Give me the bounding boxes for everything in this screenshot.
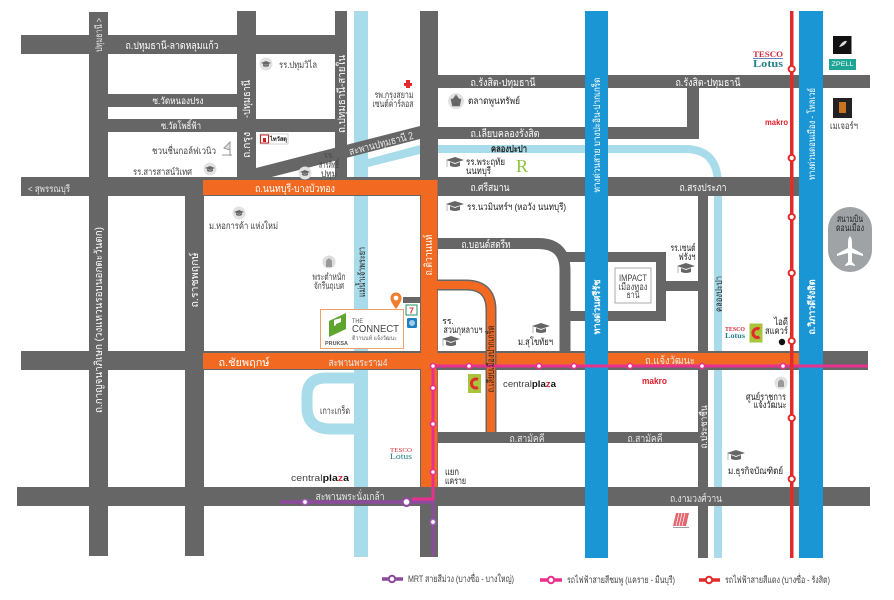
road labels vertical: ทางด่วนสาย บางปะอิน-ปากเกร็ด [590,78,603,192]
road labels vertical: ถ.เลียบเมืองปากเกร็ด [484,326,497,392]
purple MRT line [280,497,436,556]
IMPACT Muang Thong Thani: ธานี [626,289,640,301]
schools east: ม.สุโขทัยฯ [518,336,553,348]
airport: สนามบิน [837,214,863,225]
logo: Major [830,98,858,132]
market: ตลาดพูนทรัพย์ [468,95,520,107]
Khae Rai junction label [445,467,466,487]
road labels vertical: คลองปะปา [714,276,725,312]
road labels vertical: ถ.ปทุมธานี-สายใน [335,55,348,133]
logo: Tesco Lotus north: Lotus [753,58,784,70]
hospital [372,80,414,110]
IT Square with retail logos: สแควร์ [765,325,788,337]
IMPACT Muang Thong Thani: เมืองทอง [618,282,648,293]
legend: pink line [540,574,675,586]
road labels vertical: -ปทุมธานี [240,80,253,118]
market [448,93,520,109]
road labels vertical [93,18,818,449]
logo: makro north: makro [765,118,788,127]
logo: 7-Eleven: 7 [409,306,414,316]
place: schools and labels west: ปทุม [321,169,337,180]
schools east: ฟรังฯ [678,252,696,263]
road labels horizontal: สะพานปทุมธานี 2 [348,129,415,158]
place: schools and labels west: รร.สารสาสน์วิเทศ [133,166,192,178]
logo: Big C [468,374,481,393]
logo: Central Plaza east: centralplaza [503,379,557,390]
road labels horizontal: ถ.ศรีสมาน [470,181,510,194]
project pin and box: ติวานนท์ แจ้งวัฒนะ [352,334,397,342]
red line [789,11,795,558]
place: schools and labels west: รร. [324,151,334,160]
IT Square with retail logos: TESCO [725,327,745,333]
road labels horizontal: ถ.เลียบคลองรังสิต [470,127,540,140]
IMPACT Muang Thong Thani: IMPACT [619,273,647,284]
road labels horizontal: ถ.สรงประภา [680,182,726,194]
place: schools and labels west: ชวนชื่นกอล์ฟเวนิว [152,144,216,157]
road labels horizontal: ถ.นนทบุรี-บางบัวทอง [255,182,335,195]
road labels vertical: ถ.ราชพฤกษ์ [188,252,201,308]
project pin and box: PRUKSA [325,341,348,347]
logo: 7-Eleven [406,305,417,316]
road labels horizontal: ถ.บอนด์สตรีท [462,238,511,251]
road labels horizontal [28,39,740,505]
Khae Rai junction label: แยก [445,467,459,478]
logo: condo black square [833,36,852,54]
road labels horizontal: ซ.วัดหนองปรง [152,96,204,107]
road labels horizontal: ถ.ปทุมธานี-ลาดหลุมแก้ว [126,39,219,52]
IT Square with retail logos [725,316,788,345]
logo: red striped [673,513,689,528]
road labels horizontal: ถ.ชัยพฤกษ์ [218,356,270,369]
logo: Tesco Lotus centre [390,447,412,461]
Khae Rai junction label: แคราย [445,476,466,487]
place: schools and labels west: จักรีนฤเบศ [314,280,344,292]
government complex [746,376,788,411]
place: schools and labels west: เกาะเกร็ด [320,404,350,417]
road labels horizontal: สะพานพระนั่งเกล้า [316,489,384,503]
road labels horizontal: < สุพรรณบุรี [28,183,70,195]
road labels vertical: ถ.วิภาวดีรังสิต [806,280,818,334]
road labels vertical: ทางด่วนศรีรัช [591,279,603,334]
road labels vertical: แม่น้ำเจ้าพระยา [355,247,368,297]
river: Chao Phraya [307,11,420,557]
logo: Tesco Lotus north [753,49,784,70]
road labels horizontal: ซ.วัดโพธิ์ฟ้า [161,118,201,132]
logo: Thai Watsadu [260,134,288,144]
hospital: เซนต์คาร์ลอส [372,98,414,110]
legend: red line: รถไฟฟ้าสายสีแดง (บางซื่อ - รังสิต) [725,573,830,586]
schools east [442,156,783,477]
logo: Tesco Lotus centre: Lotus [390,451,412,461]
schools east: รร.พระฤทัย [466,157,505,168]
hospital: รพ.กรุงสยาม [374,90,414,101]
logo: ZPELL [829,59,856,70]
logo: Thai Watsadu: ไทวัสดุ [269,135,287,143]
road labels horizontal: ถ.รังสิต-ปทุมธานี [470,76,536,89]
schools east: รร. [442,316,454,326]
logo: ZPELL: ZPELL [832,61,854,68]
schools east: นนทบุรี [466,165,491,177]
government complex: ศูนย์ราชการ [746,391,786,403]
road labels vertical: ปทุมธานี > [93,18,105,52]
road labels horizontal: ถ.สามัคคี [510,432,544,445]
road labels horizontal: สะพานพระราม4 [328,357,388,369]
place: schools and labels west: รร.ปทุมวิไล [279,59,317,71]
schools east: สวนกุหลาบฯ [444,325,482,336]
logo: blue badge [407,318,417,328]
airport [828,207,872,272]
project pin and box [320,292,404,348]
government complex: แจ้งวัฒนะ [754,400,786,411]
place: schools and labels west: ม.หอการค้า แห่งใหม่ [209,220,278,232]
schools east: รร.นวมินทร์ฯ (หอวัง นนทบุรี) [467,201,566,213]
legend: red line [699,573,830,586]
logo: Tesco Lotus north: TESCO [753,49,783,59]
schools east: รร.เซนต์ [670,242,696,254]
road labels horizontal: ถ.งามวงศ์วาน [670,492,722,505]
logo: Central Plaza west: central plaza [291,473,350,484]
road labels horizontal: คลองปะปา [491,143,527,155]
place: schools and labels west: พระตำหนัก [312,272,346,283]
airport: ดอนเมือง [836,223,864,234]
schools east: ม.ธุรกิจบัณฑิตย์ [728,465,783,477]
project pin and box: THE [352,319,363,325]
road labels horizontal: ถ.รังสิต-ปทุมธานี [676,76,740,89]
logo: Tesco Lotus centre: TESCO [390,447,412,454]
schools east: R [516,156,528,176]
legend: MRT purple: MRT สายสีม่วง (บางซื่อ - บางใหญ่) [408,572,514,585]
IMPACT Muang Thong Thani [615,268,651,303]
place: schools and labels west [133,58,350,417]
logo: makro south: makro [642,376,667,386]
orange highlighted roads [203,180,799,487]
canal: Khlong Prapa [438,149,718,558]
road labels vertical: ถ.ประชาชื่น [697,405,710,448]
project pin and box: CONNECT [352,324,399,335]
place: schools and labels west: สารสิทธิ์ [319,157,340,171]
expressways [585,11,823,558]
pink line [412,363,868,499]
road labels vertical: ถ.ติวานนท์ [422,234,435,276]
road labels horizontal: ถ.สามัคคี [628,432,662,445]
IT Square with retail logos: ไอดี [773,316,788,328]
road labels vertical: ทางด่วนดอนเมือง - โทลเวย์ [806,88,818,180]
road labels horizontal: ถ.แจ้งวัฒนะ [645,355,695,367]
legend: MRT purple [382,572,514,585]
legend: pink line: รถไฟฟ้าสายสีชมพู (แคราย - มีนบุรี) [567,574,675,586]
logo: Major: เมเจอร์ฯ [830,120,858,132]
road labels vertical: ถ.กาญจนาภิเษก (วงแหวนรอบนอกตะวันตก) [93,227,105,413]
road labels vertical: ถ.กรุง [241,132,253,158]
IT Square with retail logos: Lotus [725,331,745,340]
